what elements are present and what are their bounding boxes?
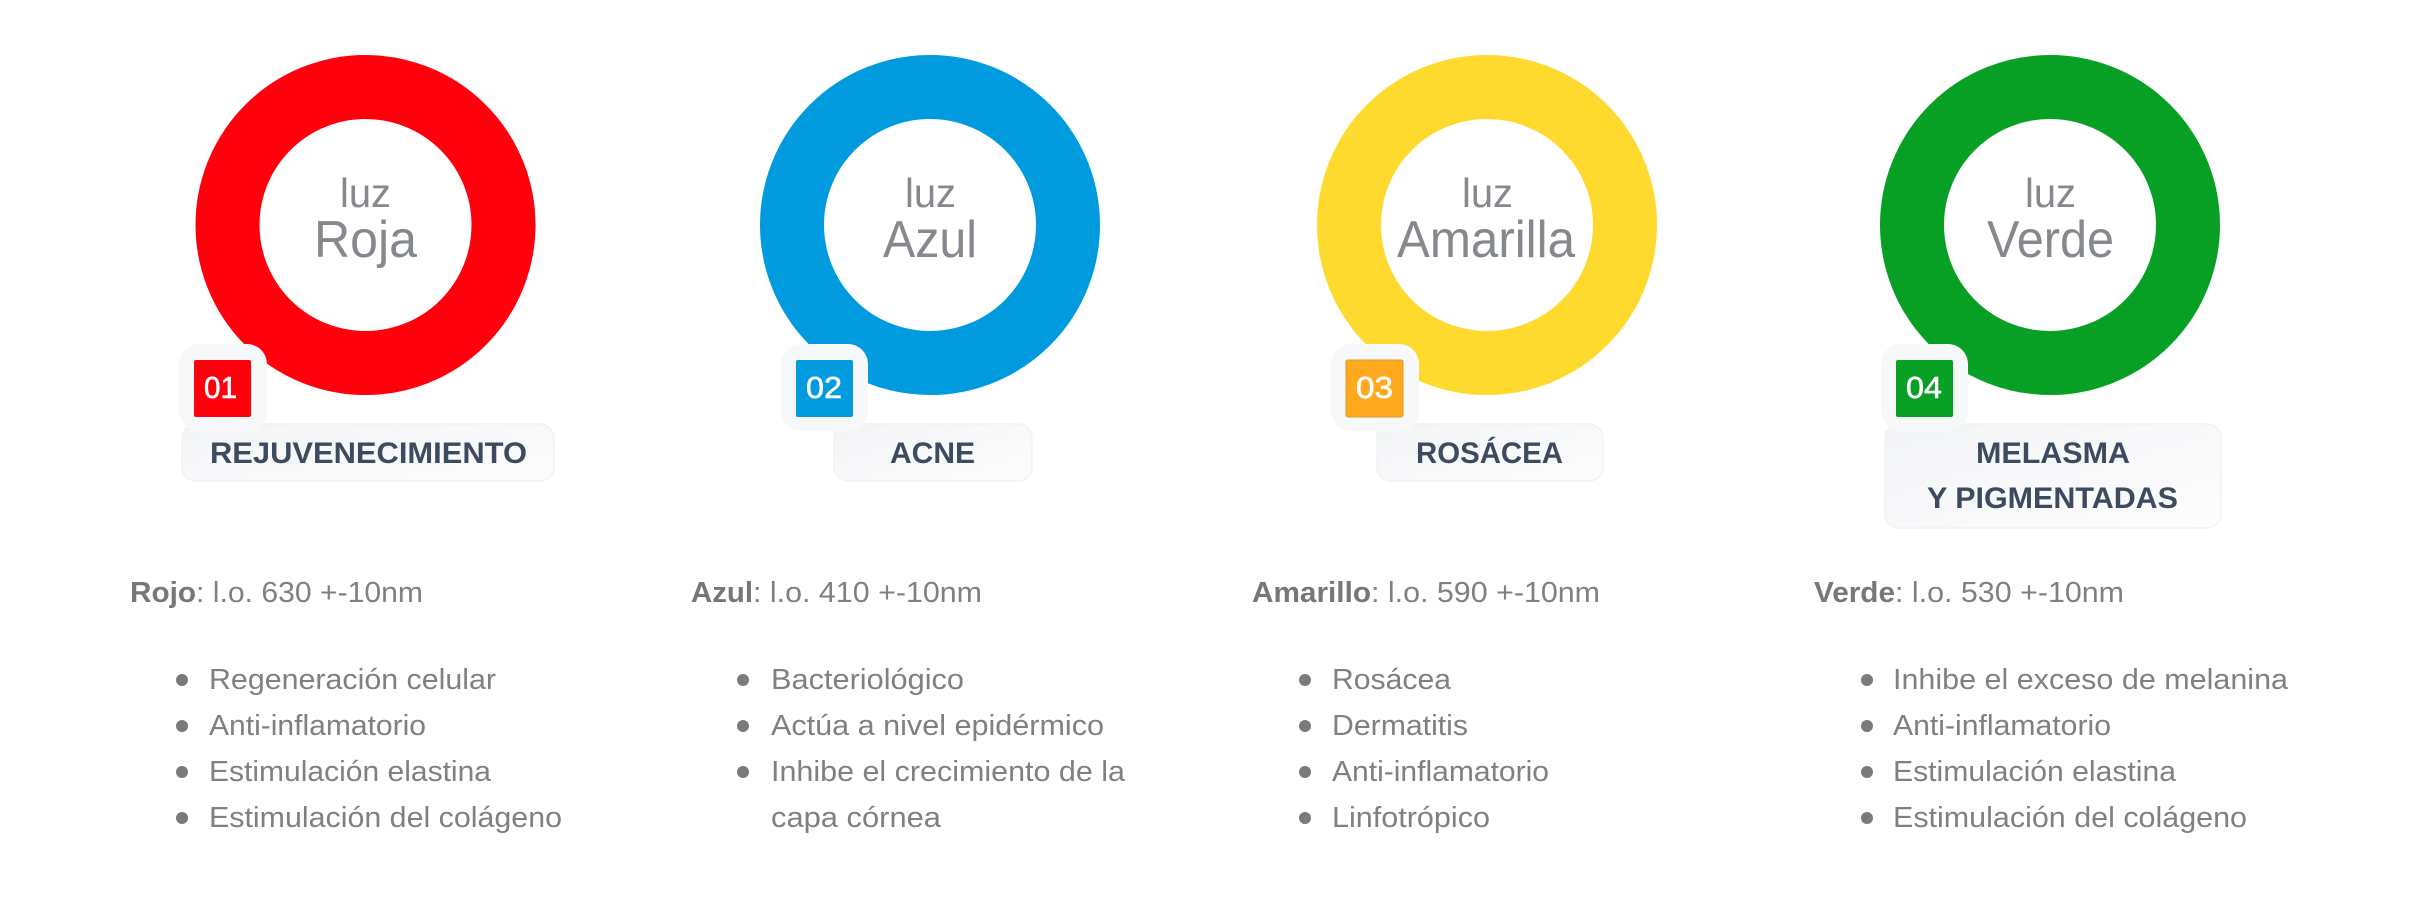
list: rojo benefits: Regeneración celular bbox=[209, 664, 496, 696]
list: amarillo benefits: Dermatitis bbox=[1332, 710, 1468, 742]
label: acne bbox=[834, 424, 1032, 481]
panel: luz verde bbox=[1814, 87, 2289, 834]
list: azul benefits: capa córnea bbox=[771, 802, 942, 834]
text: amarillo wavelength: Amarillo bbox=[1252, 577, 1371, 609]
ring: yellow bbox=[1349, 87, 1625, 363]
text: rojo wavelength: : l.o. 630 +-10nm bbox=[196, 577, 423, 609]
list: rojo benefits: Anti-inflamatorio bbox=[209, 710, 426, 742]
list: azul benefits bbox=[737, 664, 1126, 834]
text: amarillo wavelength: : l.o. 590 +-10nm bbox=[1371, 577, 1600, 609]
panel: luz roja bbox=[130, 87, 562, 834]
ring: yellow: Amarilla bbox=[1397, 211, 1575, 269]
list: azul benefits: Bacteriológico bbox=[771, 664, 964, 696]
list: azul benefits: Actúa a nivel epidérmico bbox=[771, 710, 1104, 742]
label: acne: ACNE bbox=[890, 437, 975, 470]
label: melasma y pigmentadas bbox=[1885, 424, 2221, 528]
ring: red: luz bbox=[340, 170, 391, 216]
list: verde benefits: Estimulación del colágeno bbox=[1893, 802, 2247, 834]
text: azul wavelength: Azul bbox=[691, 577, 753, 609]
text: amarillo wavelength bbox=[1252, 577, 1600, 609]
badge: 02: 02 bbox=[806, 370, 842, 405]
list: verde benefits: Estimulación elastina bbox=[1893, 756, 2177, 788]
text: verde wavelength: : l.o. 530 +-10nm bbox=[1895, 577, 2124, 609]
ring: red: Roja bbox=[314, 211, 417, 269]
label: rejuvenecimiento: REJUVENECIMIENTO bbox=[210, 437, 527, 470]
ring: green bbox=[1912, 87, 2188, 363]
list: rojo benefits: Estimulación elastina bbox=[209, 756, 492, 788]
ring: green: luz bbox=[2025, 170, 2076, 216]
badge: 02 bbox=[781, 344, 868, 431]
badge: 04: 04 bbox=[1906, 370, 1942, 405]
list: azul benefits: Inhibe el crecimiento de la bbox=[771, 756, 1126, 788]
badge: 03 bbox=[1331, 344, 1419, 431]
list: amarillo benefits bbox=[1299, 664, 1549, 834]
text: rojo wavelength: Rojo bbox=[130, 577, 196, 609]
badge: 01: 01 bbox=[204, 370, 237, 405]
label: melasma y pigmentadas: MELASMA bbox=[1976, 437, 2130, 470]
badge: 04 bbox=[1881, 344, 1968, 431]
label: rejuvenecimiento bbox=[182, 424, 554, 481]
ring: green: Verde bbox=[1987, 211, 2114, 269]
list: rojo benefits bbox=[176, 664, 562, 834]
panel: luz amarilla bbox=[1252, 87, 1625, 834]
ring: red bbox=[228, 87, 504, 363]
ring: blue: luz bbox=[905, 170, 956, 216]
ring: blue bbox=[792, 87, 1068, 363]
list: amarillo benefits: Anti-inflamatorio bbox=[1332, 756, 1549, 788]
text: azul wavelength: : l.o. 410 +-10nm bbox=[753, 577, 982, 609]
list: amarillo benefits: Linfotrópico bbox=[1332, 802, 1490, 834]
list: amarillo benefits: Rosácea bbox=[1332, 664, 1452, 696]
badge: 03: 03 bbox=[1356, 370, 1393, 405]
label: melasma y pigmentadas: Y PIGMENTADAS bbox=[1927, 482, 2178, 515]
panel: luz azul bbox=[691, 87, 1126, 834]
ring: blue: Azul bbox=[883, 211, 977, 269]
list: verde benefits bbox=[1861, 664, 2289, 834]
badge: 01 bbox=[179, 344, 267, 431]
label: rosacea: ROSÁCEA bbox=[1416, 436, 1563, 470]
label: rosacea bbox=[1377, 424, 1603, 481]
list: verde benefits: Inhibe el exceso de melanina bbox=[1893, 664, 2289, 696]
text: verde wavelength: Verde bbox=[1814, 577, 1895, 609]
ring: yellow: luz bbox=[1462, 170, 1513, 216]
list: verde benefits: Anti-inflamatorio bbox=[1893, 710, 2111, 742]
list: rojo benefits: Estimulación del colágeno bbox=[209, 802, 562, 834]
